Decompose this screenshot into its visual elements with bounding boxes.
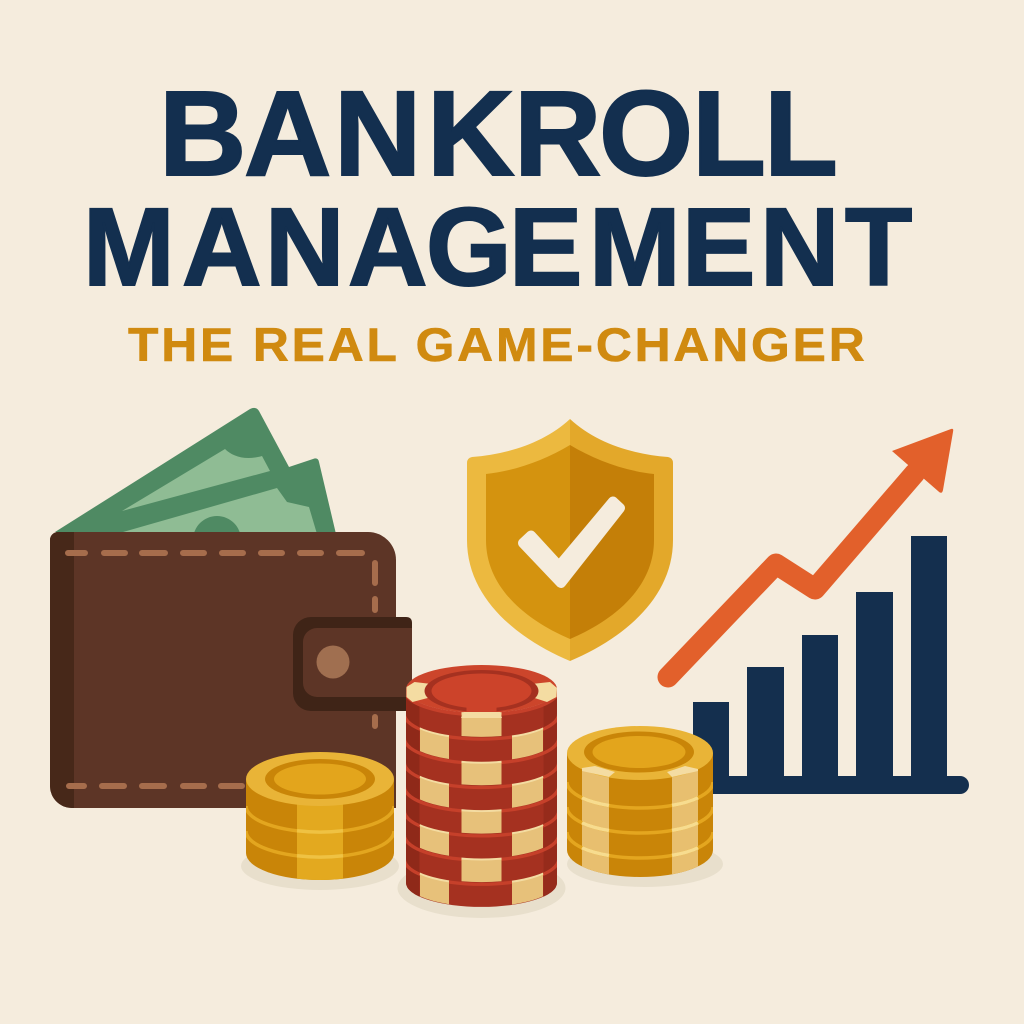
- red chip top face: [406, 665, 557, 718]
- chip shadows: [241, 841, 723, 918]
- icon: left gold chip stack: [246, 752, 394, 885]
- icon: red chip stack: [406, 665, 558, 916]
- bar chart: [693, 536, 969, 794]
- icon: wallet with cash: [50, 408, 412, 808]
- subtitle: THE REAL GAME-CHANGER: [128, 319, 865, 372]
- title: [83, 65, 912, 309]
- icon: shield with checkmark: [467, 419, 673, 661]
- arrow: rising trend: [668, 429, 953, 677]
- clasp button: [316, 646, 350, 678]
- clasp: [293, 617, 412, 711]
- title: MANAGEMENT: [83, 186, 912, 309]
- cash bills: [55, 408, 336, 532]
- wallet spine: [50, 532, 74, 808]
- title: BANKROLL: [159, 65, 838, 201]
- icon: right gold chip stack: [567, 726, 713, 885]
- wallet body: [50, 532, 396, 808]
- stitching: [68, 553, 375, 786]
